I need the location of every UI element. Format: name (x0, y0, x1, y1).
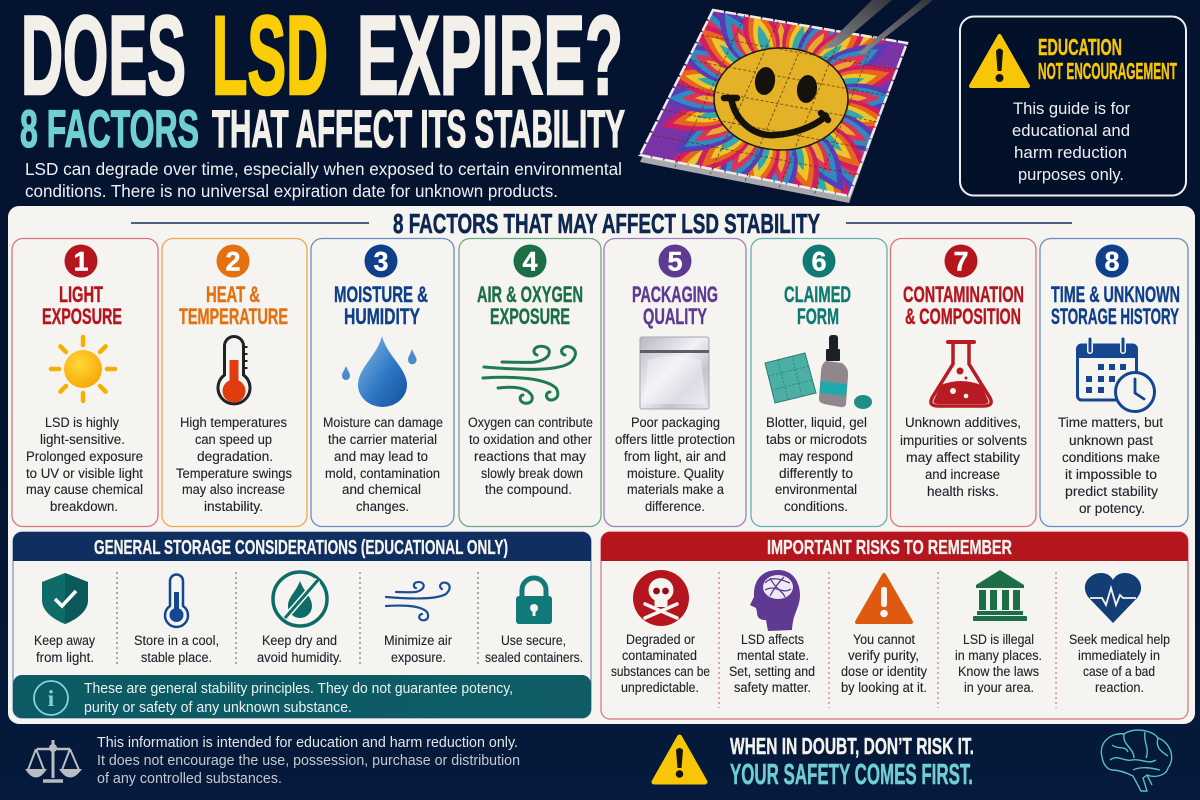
storage captions (34, 633, 583, 665)
panel: factor 8 time and unknown storage history (1040, 238, 1188, 526)
icon: shield (42, 573, 88, 624)
risk captions: dose or identity (841, 664, 927, 679)
panel: important risks to remember (601, 532, 1188, 719)
intro text (25, 159, 622, 201)
panel: factor 3 moisture and humidity: and may lead to (334, 449, 428, 464)
panel: factor 7 contamination and composition: may affect stability (906, 450, 1020, 465)
risk captions: in many places. (955, 648, 1042, 663)
icon: flask (931, 342, 991, 406)
panel: factor 6 claimed form: 6 (811, 246, 827, 276)
panel: factor 8 time and unknown storage history: Time matters, but (1058, 415, 1163, 430)
risk captions (611, 632, 1170, 695)
panel: important risks to remember: IMPORTANT RISKS TO REMEMBER (767, 537, 1012, 559)
panel: factor 2 heat and temperature: TEMPERATURE (179, 304, 288, 329)
safety slogan: WHEN IN DOUBT, DON’T RISK IT. (730, 733, 974, 759)
panel: factor 6 claimed form: tabs or microdots (766, 432, 867, 447)
panel: factor 1 light exposure: LSD is highly (45, 415, 119, 430)
risk captions: reaction. (1095, 680, 1144, 695)
panel: general storage considerations: GENERAL STORAGE CONSIDERATIONS (EDUCATIONAL ONLY) (94, 537, 508, 559)
callout: education not encouragement: purposes only. (1018, 165, 1124, 184)
storage captions: exposure. (391, 650, 446, 665)
risk captions: safety matter. (734, 680, 811, 695)
panel: factor 8 time and unknown storage history: or potency. (1079, 501, 1145, 516)
icon: warning triangle (971, 36, 1028, 86)
panel: factor 6 claimed form: Blotter, liquid, gel (766, 415, 867, 430)
panel: factor 5 packaging quality: difference. (645, 499, 705, 514)
risk captions: LSD is illegal (963, 632, 1034, 647)
panel: factor 8 time and unknown storage history: conditions make (1062, 450, 1160, 465)
panel: factor 2 heat and temperature: HEAT & (206, 282, 260, 307)
risk captions: contaminated (622, 648, 697, 663)
panel: factor 3 moisture and humidity (311, 238, 454, 526)
image: smiley blotter sheet with tweezers (638, 0, 933, 203)
panel: factor 2 heat and temperature: Temperature swings (176, 466, 292, 481)
intro text: conditions. There is no universal expiration date for unknown products. (25, 181, 558, 201)
panel: factor 3 moisture and humidity: the carrier material (328, 432, 437, 447)
intro text: LSD can degrade over time, especially when exposed to certain environmental (25, 159, 622, 179)
panel: factor 3 moisture and humidity: MOISTURE & (334, 282, 428, 307)
panel: factor 5 packaging quality: QUALITY (643, 304, 707, 329)
panel: factor 4 air and oxygen exposure: reactions that may (474, 449, 586, 464)
panel: factor 5 packaging quality: from light, air and (624, 449, 726, 464)
icon: blotter, dropper bottle and gel tab (765, 335, 872, 409)
panel: factor 7 contamination and composition: and increase (925, 467, 1000, 482)
panel: factor 8 time and unknown storage history: 8 (1104, 246, 1120, 276)
panel: factor 2 heat and temperature: may also increase (182, 482, 285, 497)
main white panel (8, 206, 1195, 724)
callout: education not encouragement: harm reduction (1014, 143, 1127, 162)
callout: education not encouragement: educational and (1012, 121, 1130, 140)
panel: factor 5 packaging quality: PACKAGING (632, 282, 718, 307)
icon: courthouse (973, 570, 1027, 621)
disclaimer text (97, 735, 520, 787)
icon: skull and crossbones (633, 570, 689, 626)
info note: i (48, 686, 55, 711)
icon: calendar and clock (1077, 339, 1154, 412)
panel: factor 2 heat and temperature: instability. (204, 499, 263, 514)
panel: factor 5 packaging quality: materials make a (627, 482, 725, 497)
panel: factor 1 light exposure: 1 (73, 246, 89, 276)
subtitle: 8 FACTORS (20, 100, 199, 159)
risk captions: Degraded or (626, 632, 695, 647)
info note (13, 675, 591, 718)
panel: factor 2 heat and temperature (162, 238, 307, 526)
panel: factor 5 packaging quality: Poor packaging (631, 415, 720, 430)
icon: thermometer (218, 336, 250, 404)
storage captions: Minimize air (384, 633, 453, 648)
panel: factor 8 time and unknown storage history: it impossible to (1065, 467, 1157, 482)
risk captions: mental state. (737, 648, 809, 663)
panel: factor 3 moisture and humidity: HUMIDITY (344, 304, 420, 329)
risk captions: by looking at it. (841, 680, 927, 695)
icon: padlock (516, 578, 552, 624)
panel: factor 2 heat and temperature: High temperatures (180, 415, 287, 430)
panel: factor 4 air and oxygen exposure: EXPOSURE (490, 304, 570, 329)
callout: education not encouragement (960, 16, 1186, 196)
panel: factor 4 air and oxygen exposure: AIR & OXYGEN (477, 282, 583, 307)
panel: factor 1 light exposure: Prolonged exposure (26, 449, 143, 464)
icon: cool thermometer (165, 575, 188, 627)
icon: foil pouch (640, 337, 709, 409)
icon: brain outline (1101, 730, 1172, 791)
panel: factor 3 moisture and humidity: and chemical (342, 482, 421, 497)
risk captions: unpredictable. (621, 680, 699, 695)
panel: factor 4 air and oxygen exposure: 4 (522, 246, 538, 276)
disclaimer text: This information is intended for education and harm reduction only. (97, 735, 518, 751)
icon: heart with pulse (1085, 573, 1141, 623)
panel: factor 1 light exposure (12, 238, 158, 526)
panel: factor 1 light exposure: light-sensitive. (40, 432, 125, 447)
icon: air (386, 582, 450, 620)
risk captions: in your area. (964, 680, 1034, 695)
storage captions: stable place. (141, 650, 212, 665)
icon: warning triangle (857, 575, 911, 622)
heading: 8 factors that may affect LSD stability: 8 FACTORS THAT MAY AFFECT LSD STABILITY (393, 208, 820, 239)
panel: factor 1 light exposure: breakdown. (50, 499, 118, 514)
safety slogan: YOUR SAFETY COMES FIRST. (730, 759, 973, 791)
risk captions: Set, setting and (729, 664, 815, 679)
panel: factor 1 light exposure: LIGHT (59, 282, 103, 307)
title (21, 0, 623, 118)
panel: factor 6 claimed form: environmental (775, 482, 857, 497)
panel: factor 4 air and oxygen exposure: the compound. (485, 482, 572, 497)
panel: factor 1 light exposure: EXPOSURE (42, 304, 122, 329)
icon: sun (51, 337, 115, 401)
panel: factor 6 claimed form: CLAIMED (784, 282, 851, 307)
risk captions: Seek medical help (1069, 632, 1170, 647)
panel: factor 4 air and oxygen exposure: Oxygen can contribute (468, 415, 593, 430)
icon: no humidity (273, 572, 327, 626)
panel: factor 2 heat and temperature: can speed up (195, 432, 272, 447)
info note: purity or safety of any unknown substance. (84, 700, 352, 716)
panel: factor 6 claimed form: differently to (779, 466, 853, 481)
storage captions: avoid humidity. (257, 650, 342, 665)
panel: factor 6 claimed form: FORM (797, 304, 839, 329)
risk captions: immediately in (1078, 648, 1160, 663)
storage captions: Keep dry and (262, 633, 337, 648)
panel: factor 1 light exposure: to UV or visible light (26, 466, 143, 481)
panel: factor 2 heat and temperature: 2 (225, 246, 241, 276)
risk captions: verify purity, (848, 648, 919, 663)
storage captions: Keep away (34, 633, 95, 648)
panel: factor 8 time and unknown storage history: predict stability (1065, 484, 1158, 499)
panel: factor 7 contamination and composition: & COMPOSITION (905, 304, 1021, 329)
risk captions: case of a bad (1083, 664, 1155, 679)
panel: factor 6 claimed form: may respond (779, 449, 853, 464)
storage captions: Use secure, (501, 633, 566, 648)
callout: education not encouragement: EDUCATION (1038, 34, 1122, 60)
panel: general storage considerations (13, 532, 591, 718)
storage captions: Store in a cool, (134, 633, 219, 648)
panel: factor 3 moisture and humidity: changes. (356, 499, 409, 514)
panel: factor 3 moisture and humidity: mold, contamination (325, 466, 440, 481)
icon: head with brain (750, 570, 800, 631)
panel: factor 8 time and unknown storage history: unknown past (1069, 433, 1153, 448)
panel: factor 6 claimed form: conditions. (784, 499, 848, 514)
risk captions: You cannot (853, 632, 915, 647)
info note: These are general stability principles. They do not guarantee potency, (84, 681, 513, 697)
panel: factor 3 moisture and humidity: Moisture can damage (323, 415, 443, 430)
safety slogan (730, 733, 974, 791)
panel: factor 5 packaging quality (604, 238, 746, 526)
icon: water drops (342, 336, 417, 407)
icon: wind (483, 346, 575, 403)
disclaimer text: It does not encourage the use, possession, purchase or distribution (97, 753, 520, 769)
disclaimer text: of any controlled substances. (97, 771, 282, 787)
storage captions: from light. (36, 650, 94, 665)
risk captions: LSD affects (741, 632, 804, 647)
panel: factor 5 packaging quality: offers little protection (615, 432, 735, 447)
storage captions: sealed containers. (485, 650, 583, 665)
subtitle (20, 100, 625, 159)
panel: factor 7 contamination and composition: 7 (953, 246, 969, 276)
panel: factor 7 contamination and composition: CONTAMINATION (903, 282, 1024, 307)
panel: factor 5 packaging quality: 5 (667, 246, 683, 276)
panel: factor 7 contamination and composition: health risks. (927, 484, 999, 499)
risk captions: substances can be (611, 664, 710, 679)
panel: factor 4 air and oxygen exposure (459, 238, 601, 526)
panel: factor 3 moisture and humidity: 3 (373, 246, 389, 276)
panel: factor 5 packaging quality: moisture. Quality (627, 466, 724, 481)
panel: factor 7 contamination and composition: impurities or solvents (900, 433, 1027, 448)
panel: factor 4 air and oxygen exposure: to oxidation and other (469, 432, 593, 447)
panel: factor 1 light exposure: may cause chemical (26, 482, 143, 497)
subtitle: THAT AFFECT ITS STABILITY (212, 100, 625, 159)
icon: scales of justice (27, 740, 80, 781)
panel: factor 2 heat and temperature: degradation. (197, 449, 273, 464)
panel: factor 6 claimed form (751, 238, 887, 526)
icon: footer warning triangle (654, 737, 705, 782)
panel: factor 7 contamination and composition: Unknown additives, (905, 415, 1021, 430)
panel: factor 7 contamination and composition (890, 238, 1036, 526)
panel: factor 4 air and oxygen exposure: slowly break down (481, 466, 583, 481)
risk captions: Know the laws (958, 664, 1039, 679)
callout: education not encouragement: This guide is for (1013, 99, 1130, 118)
